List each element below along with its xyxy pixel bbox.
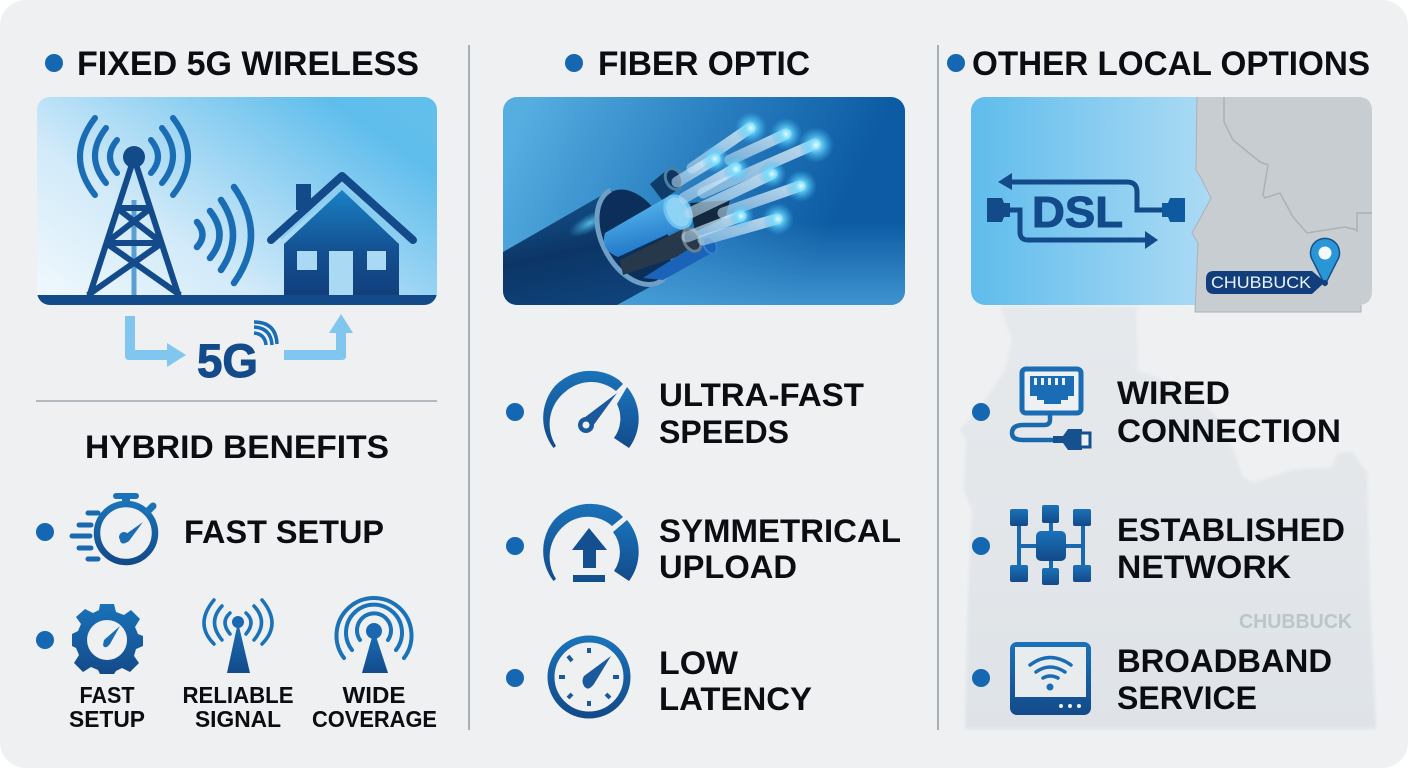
feature: established network: ESTABLISHED — [1117, 512, 1345, 548]
benefit: wide coverage — [312, 598, 437, 732]
illustration: DSL and Idaho map — [971, 97, 1372, 312]
feature: broadband service: SERVICE — [1117, 680, 1257, 716]
icon: DSL connections: DSL — [1032, 188, 1123, 237]
map pin — [1311, 238, 1340, 286]
fiber tip glows — [701, 112, 834, 235]
icon: upload gauge — [543, 504, 639, 582]
divider — [36, 400, 437, 402]
benefit: wide coverage: WIDE — [342, 682, 406, 708]
feature: wired connection — [972, 369, 1341, 450]
cable jacket — [503, 190, 659, 305]
feature: symmetrical upload: UPLOAD — [659, 549, 797, 585]
benefit: fast setup gear — [69, 604, 145, 732]
icon: broadcast waves — [197, 187, 251, 283]
benefit row: fast setup — [36, 493, 384, 562]
icon: stopwatch — [72, 493, 155, 562]
heading: fiber optic: FIBER OPTIC — [598, 45, 810, 83]
feature: ultra-fast speeds — [506, 371, 864, 450]
feature: low latency: LATENCY — [659, 681, 812, 717]
icon: clock dial — [551, 639, 627, 715]
inner tubes — [690, 200, 730, 232]
arrow: tower to 5G — [125, 316, 186, 367]
benefit: reliable signal: RELIABLE — [182, 682, 294, 708]
feature: low latency: LOW — [659, 645, 739, 681]
glass fibers — [677, 128, 815, 240]
feature: symmetrical upload — [506, 504, 901, 585]
feature: ultra-fast speeds: SPEEDS — [659, 414, 789, 450]
benefit: wide coverage: COVERAGE — [312, 706, 437, 732]
benefit: fast setup gear: FAST — [80, 682, 134, 708]
feature: symmetrical upload: SYMMETRICAL — [659, 513, 901, 549]
illustration: tower to house — [37, 97, 437, 305]
feature: low latency — [506, 639, 812, 717]
feature: established network: NETWORK — [1117, 549, 1291, 585]
cable end face — [594, 188, 671, 287]
watermark: Idaho map silhouette — [960, 306, 1376, 729]
icon: ethernet cable — [1012, 369, 1090, 450]
panel: fixed 5G wireless — [37, 45, 437, 387]
arrow: 5G to house — [284, 314, 353, 360]
panel: fiber optic — [503, 45, 905, 717]
icon: wifi router — [1010, 642, 1091, 715]
benefit: reliable signal — [182, 600, 294, 732]
map: Idaho with Chubbuck — [1192, 97, 1372, 312]
icon: DSL connections — [987, 173, 1185, 249]
benefit: reliable signal: SIGNAL — [195, 706, 281, 732]
benefit: fast setup gear: SETUP — [69, 706, 145, 732]
feature: broadband service — [972, 642, 1332, 716]
column dividers — [469, 45, 938, 730]
icon: house — [271, 176, 413, 295]
heading: other local options: OTHER LOCAL OPTIONS — [972, 45, 1370, 83]
feature: established network — [972, 505, 1345, 585]
icon: network nodes — [1010, 505, 1091, 585]
feature: wired connection: CONNECTION — [1117, 413, 1341, 449]
benefit row: three icons — [36, 598, 437, 732]
label: Chubbuck tag — [1206, 271, 1325, 294]
icon: tower signal waves — [80, 118, 188, 195]
label: Chubbuck tag: CHUBBUCK — [1211, 273, 1312, 292]
label: 5G: 5G — [197, 334, 258, 387]
feature: wired connection: WIRED — [1117, 375, 1230, 411]
icon: cell tower — [88, 146, 180, 297]
illustration: fiber optic cable — [503, 97, 905, 305]
watermark label: Chubbuck: CHUBBUCK — [1239, 611, 1353, 633]
panel: other local options — [947, 45, 1372, 716]
feature: ultra-fast speeds: ULTRA-FAST — [659, 377, 864, 413]
heading: fixed 5G wireless: FIXED 5G WIRELESS — [77, 45, 419, 83]
feature: broadband service: BROADBAND — [1117, 643, 1332, 679]
label: 5G — [197, 322, 277, 387]
benefit row: fast setup: FAST SETUP — [184, 514, 384, 550]
heading: hybrid benefits: HYBRID BENEFITS — [85, 429, 389, 465]
icon: speedometer — [543, 371, 639, 448]
